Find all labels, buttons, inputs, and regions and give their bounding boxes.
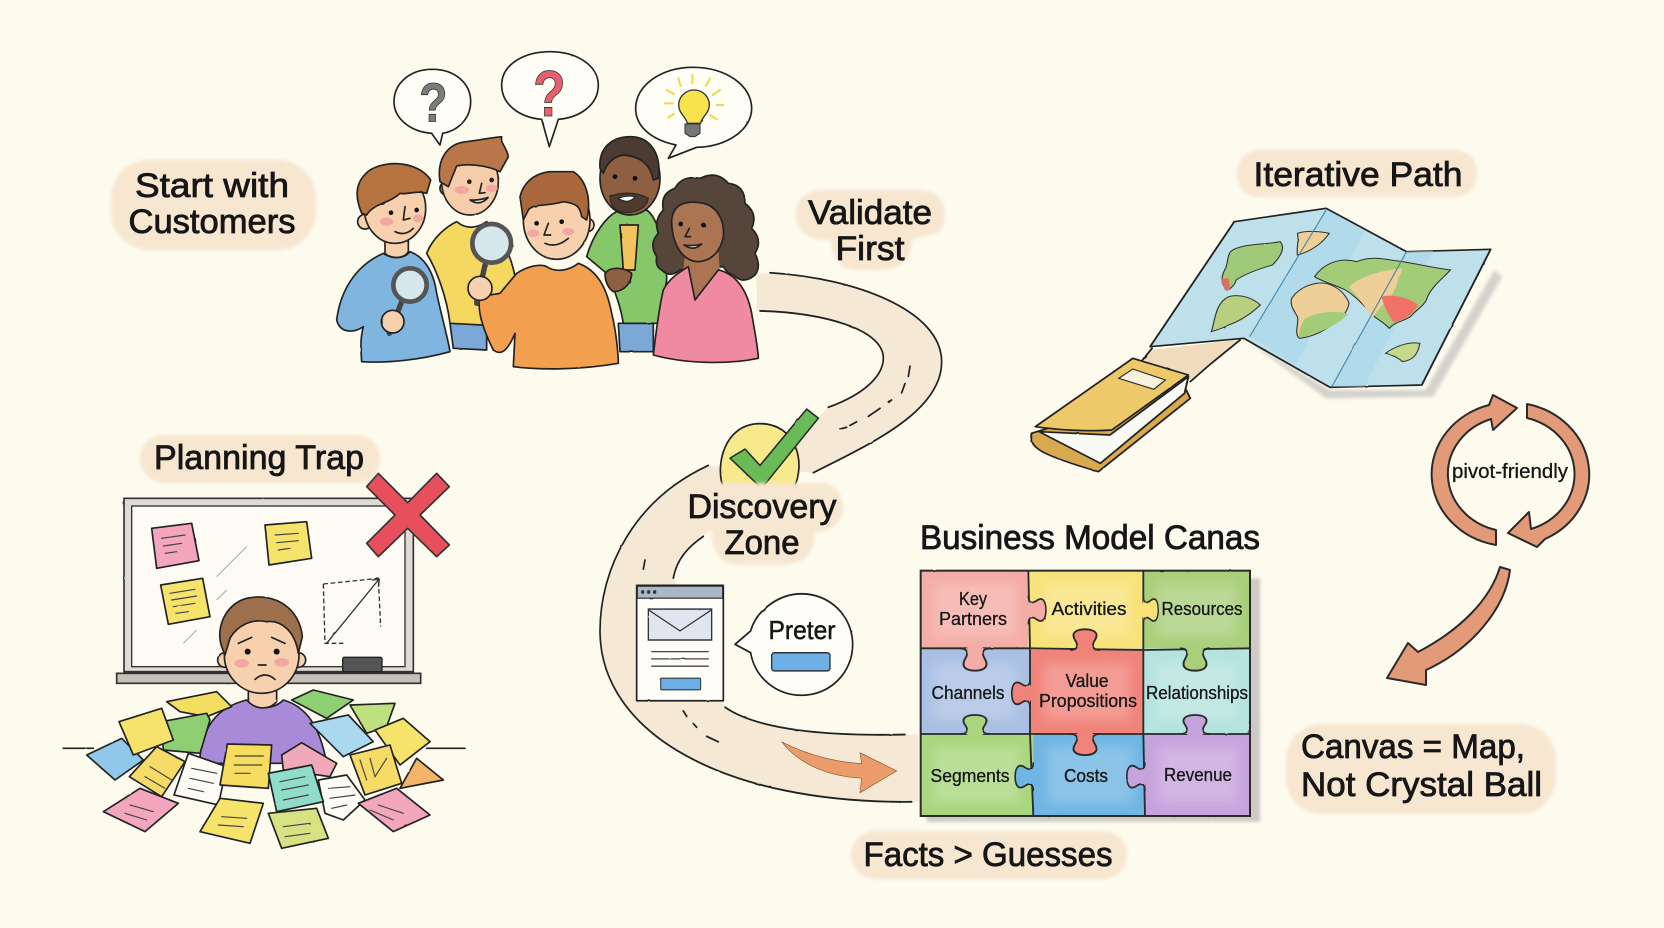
- speech bubble: grey question: [394, 69, 471, 145]
- Preter speech bubble: [735, 594, 853, 695]
- label: Canvas = Map, Not Crystal Ball: [1286, 724, 1556, 814]
- label: Validate First: Validate: [808, 194, 932, 232]
- puzzle labels: Relationships: [1146, 682, 1248, 703]
- title: Business Model Canas: Business Model Canas: [920, 519, 1260, 557]
- puzzle labels: Key: [959, 588, 988, 609]
- label: Discovery Zone: Discovery: [688, 488, 836, 526]
- pivot-friendly cycle arrows: pivot-friendly: [1452, 461, 1568, 483]
- business model canvas puzzle: [921, 571, 1260, 822]
- puzzle labels: Activities: [1052, 598, 1126, 619]
- label: Validate First: [796, 190, 945, 270]
- landing page window: [637, 585, 723, 701]
- label: Discovery Zone: Zone: [724, 524, 800, 562]
- book: [1031, 358, 1190, 472]
- speech bubble: red question: ?: [533, 57, 566, 130]
- puzzle labels: [930, 588, 1248, 786]
- person: yellow sweater: [427, 137, 517, 350]
- label: Iterative Path: [1237, 150, 1477, 197]
- road direction arrow: [782, 742, 897, 793]
- puzzle labels: Segments: [930, 765, 1010, 786]
- label: Validate First: First: [836, 230, 905, 268]
- worried person: [200, 597, 327, 763]
- planning trap illustration: [63, 473, 465, 848]
- map strip: [1142, 340, 1240, 382]
- speech bubble: red question: [502, 52, 598, 147]
- sticky note pile: [87, 690, 443, 848]
- people group with speech bubbles: [337, 52, 758, 369]
- watercolour highlights: [933, 583, 1238, 803]
- label: Facts > Guesses: Facts > Guesses: [864, 836, 1112, 874]
- label: Start with Customers: [111, 160, 316, 250]
- speech bubble: lightbulb idea: [636, 67, 752, 158]
- sticky note scribbles: [125, 756, 403, 837]
- puzzle tabs: [960, 596, 1210, 791]
- puzzle labels: Propositions: [1039, 690, 1137, 711]
- person: man in green shirt: [587, 137, 667, 352]
- speech bubble: grey question: ?: [419, 72, 447, 134]
- red X: [367, 473, 449, 557]
- table line: [63, 746, 465, 751]
- continents: [1211, 231, 1450, 362]
- label: Iterative Path: Iterative Path: [1254, 156, 1462, 194]
- label: Canvas = Map, Not Crystal Ball: Canvas = Map,: [1301, 728, 1525, 766]
- pivot-friendly cycle arrows: [1432, 395, 1589, 547]
- label: Start with Customers: Start with: [135, 167, 289, 205]
- winding road: [600, 273, 942, 802]
- puzzle labels: Resources: [1162, 598, 1242, 619]
- label: Planning Trap: Planning Trap: [154, 439, 364, 477]
- person: orange sweater with magnifier: [468, 172, 618, 369]
- puzzle labels: Channels: [932, 682, 1004, 703]
- puzzle labels: Revenue: [1164, 764, 1232, 785]
- puzzle labels: Partners: [939, 608, 1007, 629]
- label: Planning Trap: [140, 435, 380, 483]
- discovery zone checkmark: [720, 409, 818, 489]
- landing page window and Preter bubble: [637, 585, 853, 701]
- puzzle cells: [921, 571, 1250, 816]
- puzzle labels: Value: [1066, 670, 1108, 691]
- arrow down to conclusion: [1387, 567, 1510, 685]
- puzzle grid lines: [921, 571, 1250, 816]
- person: blue sweater with magnifier: [337, 164, 450, 362]
- folded map with book: [1031, 208, 1502, 472]
- whiteboard: [117, 498, 421, 683]
- puzzle labels: Costs: [1064, 765, 1108, 786]
- map sheet: [1150, 208, 1491, 387]
- label: Discovery Zone: [687, 483, 843, 565]
- label: Start with Customers: Customers: [128, 203, 296, 241]
- person: woman in pink sweater: [653, 175, 758, 362]
- label: Canvas = Map, Not Crystal Ball: Not Crystal Ball: [1301, 766, 1542, 804]
- Preter speech bubble: Preter: [768, 615, 836, 645]
